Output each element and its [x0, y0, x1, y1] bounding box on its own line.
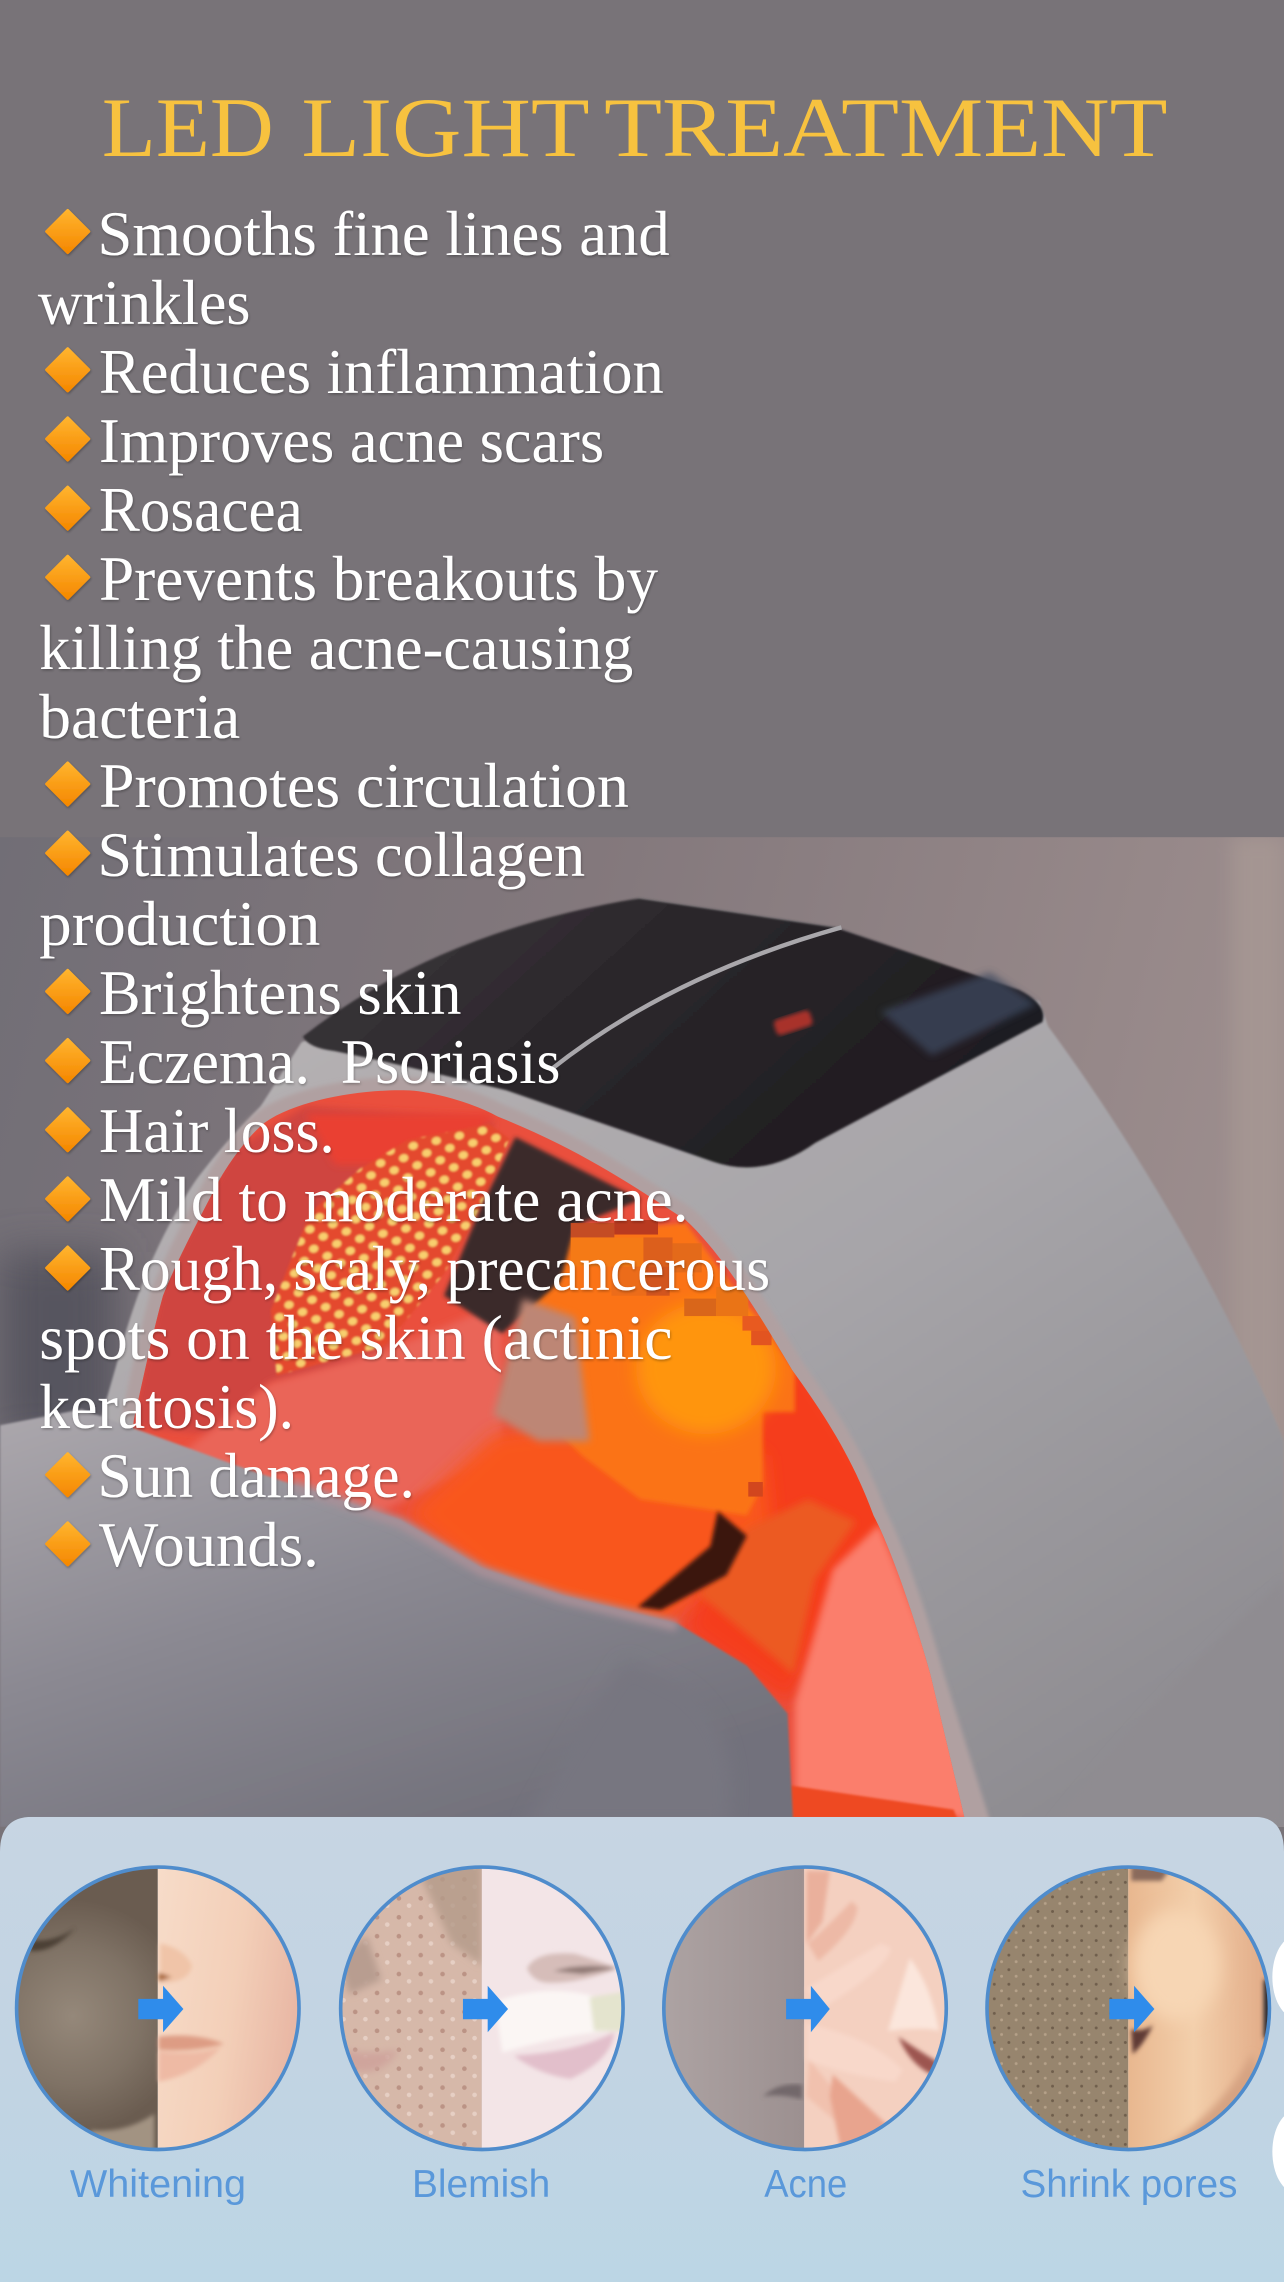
wall background [476, 837, 1284, 1827]
text block: benefits list [38, 198, 770, 1580]
benefit lines: Eczema. Psoriasis [99, 1026, 560, 1097]
pillow [494, 1299, 590, 1441]
circle: acne [661, 1863, 953, 2155]
benefit lines: keratosis). [39, 1371, 294, 1442]
head [523, 1223, 795, 1516]
dark hair streak [638, 1511, 747, 1610]
panel: before and after results [0, 1817, 1284, 2282]
device white shell [90, 898, 1284, 1827]
device inner arch [87, 1090, 967, 1827]
benefit lines [38, 198, 770, 1580]
circle outline [987, 1867, 1269, 2149]
inner left wall [131, 1106, 495, 1434]
person's shirt [0, 1409, 793, 1827]
bullet diamonds [47, 210, 89, 1565]
benefit lines: spots on the skin (actinic [39, 1302, 673, 1373]
benefit lines: Sun damage. [98, 1440, 415, 1511]
benefit lines: killing the acne-causing [39, 612, 633, 683]
lower right pink glow [795, 1524, 972, 1820]
neck and chest orange [408, 1419, 772, 1631]
hair strands [699, 1499, 856, 1674]
device black top panel [303, 898, 1043, 1167]
benefit lines: Promotes circulation [99, 750, 629, 821]
bottom red strip [786, 1785, 961, 1827]
circle outline [17, 1867, 299, 2149]
device vent [881, 972, 1037, 1055]
red hair area [684, 1354, 903, 1703]
benefit lines: Mild to moderate acne. [99, 1164, 689, 1235]
label: Blemish: Blemish [412, 2162, 550, 2206]
benefit lines: bacteria [39, 681, 240, 752]
benefit lines: wrinkles [38, 267, 250, 338]
label: Whitening: Whitening [70, 2162, 246, 2206]
circle: blemish [338, 1863, 627, 2155]
shirt sleeve shadow [524, 1660, 731, 1827]
benefit lines: Prevents breakouts by [99, 543, 658, 614]
benefit lines: Brightens skin [99, 957, 461, 1028]
label: Shrink pores: Shrink pores [1021, 2162, 1237, 2206]
white edge blob top [1272, 1936, 1284, 2018]
benefit lines: Wounds. [99, 1509, 319, 1580]
device display digits [773, 1009, 814, 1036]
benefit lines: Smooths fine lines and [98, 198, 670, 269]
arrow [1109, 1986, 1154, 2032]
title: LIGHT [301, 82, 590, 175]
title [102, 82, 1168, 175]
label: Acne: Acne [764, 2162, 847, 2206]
benefit lines: production [39, 888, 320, 959]
title: LED [102, 82, 274, 175]
device divider line [550, 927, 841, 1070]
benefit lines: Improves acne scars [99, 405, 604, 476]
arrow [463, 1986, 508, 2032]
panel: grey header background [0, 0, 1284, 839]
LED array [271, 1124, 510, 1376]
arrow [138, 1986, 183, 2032]
benefit lines: Hair loss. [99, 1095, 335, 1166]
benefit lines: Stimulates collagen [98, 819, 585, 890]
photo: LED mask device with person [0, 837, 1284, 1827]
dark inner panel [444, 1137, 641, 1334]
bed glow [160, 1303, 502, 1572]
circle: whitening [12, 1863, 303, 2155]
device arch rim [134, 1090, 978, 1827]
benefit lines: Rough, scaly, precancerous [99, 1233, 770, 1304]
circle outline [341, 1867, 623, 2149]
title: TREATMENT [604, 82, 1168, 175]
panel background [0, 1817, 1284, 2282]
pixelated face block [571, 1220, 772, 1497]
shirt top edge glow [291, 1485, 677, 1626]
circle: shrink pores [984, 1863, 1281, 2155]
benefit lines: Rosacea [99, 474, 303, 545]
benefit lines: Reduces inflammation [99, 336, 664, 407]
bright cheek [636, 1303, 776, 1434]
arrow [786, 1986, 830, 2032]
circle outline [664, 1867, 946, 2149]
white edge blob bottom [1272, 2111, 1284, 2192]
device lower crease [1048, 1580, 1284, 1827]
LED glow top [306, 1114, 495, 1165]
